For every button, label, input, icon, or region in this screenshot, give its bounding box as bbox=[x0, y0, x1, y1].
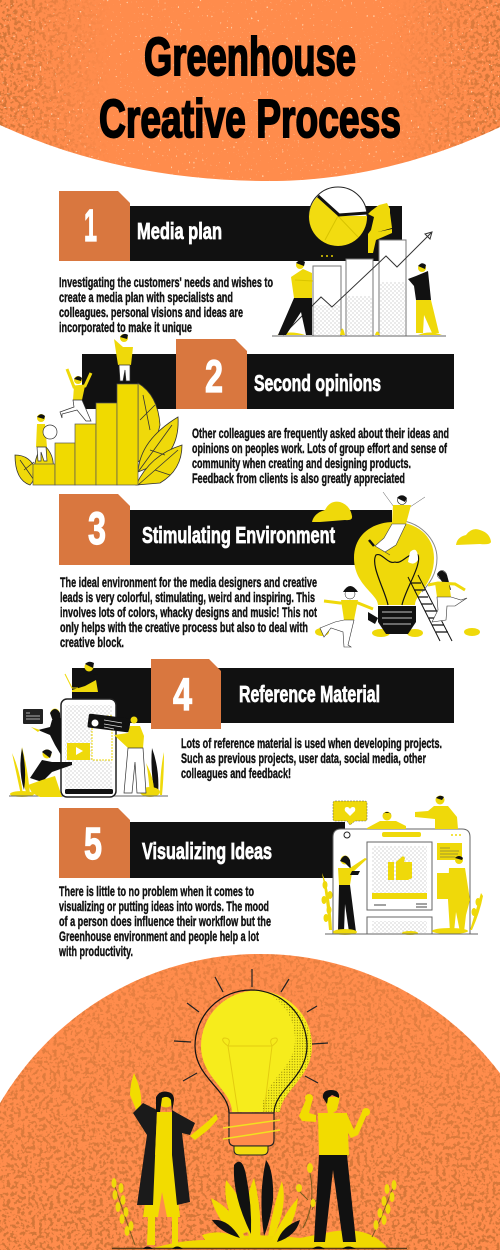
step 3 text: leads is very colorful, stimulating, weird and inspiring. This bbox=[60, 589, 315, 605]
step 5 header bar bbox=[130, 822, 345, 878]
person on pie bbox=[368, 203, 392, 253]
title bbox=[99, 27, 401, 149]
illustration: stairs and leaves bbox=[15, 334, 182, 485]
shorts bbox=[143, 1155, 180, 1217]
left sprig bbox=[112, 1178, 135, 1245]
step 2 number: 2 bbox=[205, 351, 223, 402]
ground line bbox=[112, 1248, 407, 1250]
side note bbox=[437, 843, 462, 899]
man right bbox=[114, 716, 146, 793]
woman behind phone bbox=[31, 708, 61, 755]
legs bbox=[314, 1155, 356, 1242]
rays bbox=[174, 969, 328, 1083]
chart bars bbox=[313, 240, 406, 336]
step 3 text: The ideal environment for the media designers and creative bbox=[60, 574, 317, 590]
person on bulb bbox=[369, 492, 425, 555]
yellow leaves bbox=[202, 1178, 298, 1240]
step 1 heading: Media plan bbox=[137, 218, 222, 244]
illustration: growth chart team bbox=[272, 187, 446, 336]
light bulb bbox=[354, 520, 437, 634]
person with sack bbox=[36, 414, 57, 461]
top orange header bbox=[0, 0, 500, 190]
step 3 text: only helps with the creative process but also to deal with bbox=[60, 619, 308, 635]
illustration: phone and users bbox=[9, 662, 168, 797]
ladder bbox=[408, 575, 452, 641]
step 1 text: create a media plan with specialists and bbox=[59, 289, 233, 305]
panel: step 5 visualizing ideas bbox=[58, 796, 483, 959]
man on top with laptop bbox=[65, 662, 98, 692]
black leaves bbox=[212, 1160, 300, 1242]
arms bbox=[299, 1097, 368, 1138]
step 4 text: colleagues and feedback! bbox=[181, 765, 291, 781]
arrow bbox=[283, 232, 432, 335]
step 5 text bbox=[58, 883, 271, 959]
title: Greenhouse bbox=[144, 27, 356, 87]
head bbox=[323, 1090, 340, 1113]
right sprig bbox=[372, 1180, 396, 1237]
step 1 header bar bbox=[130, 206, 402, 261]
woman left bbox=[338, 856, 367, 932]
step 5 text: of a person does influence their workflow but the bbox=[59, 913, 271, 929]
plants bbox=[322, 873, 483, 935]
step 5 text: Greenhouse environment and people help a lot bbox=[59, 928, 259, 944]
plants bbox=[10, 747, 164, 797]
raised arm bbox=[130, 1073, 143, 1112]
step 5 text: There is little to no problem when it comes to bbox=[59, 883, 254, 899]
step 4 number tab bbox=[151, 659, 221, 729]
illustration: woman bbox=[130, 1073, 218, 1249]
chat bubble large bbox=[87, 713, 131, 733]
panel: step 1 media plan bbox=[59, 187, 446, 336]
step 1 text bbox=[59, 274, 273, 335]
screen bbox=[333, 829, 470, 934]
ground bbox=[9, 795, 168, 797]
illustration: big light bulb bbox=[174, 969, 328, 1155]
step 2 header bar bbox=[82, 354, 454, 409]
kneeling man bbox=[28, 750, 72, 797]
step 2 text bbox=[192, 425, 449, 486]
step 5 number: 5 bbox=[84, 818, 102, 869]
stairs bbox=[33, 384, 138, 485]
panel: step 3 stimulating environment bbox=[59, 492, 491, 650]
step 4 heading: Reference Material bbox=[239, 681, 380, 707]
step 4 number: 4 bbox=[173, 669, 192, 720]
step 1 text: incorporated to make it unique bbox=[59, 319, 192, 335]
step 3 header bar bbox=[130, 510, 392, 565]
pie chart bbox=[309, 187, 367, 246]
head bbox=[156, 1092, 174, 1112]
man right bbox=[448, 856, 470, 932]
clouds bbox=[312, 502, 491, 637]
step 1 number: 1 bbox=[84, 200, 97, 251]
panel: step 4 reference material bbox=[9, 659, 454, 797]
step 3 number: 3 bbox=[88, 503, 106, 554]
illustration: man bbox=[299, 1090, 370, 1249]
torso bbox=[318, 1113, 349, 1156]
step 1 text: colleagues. personal visions and ideas are bbox=[59, 304, 243, 320]
shoes bbox=[312, 1246, 356, 1249]
person jumping bbox=[60, 369, 91, 421]
step 3 heading: Stimulating Environment bbox=[142, 522, 335, 548]
step 5 text: visualizing or putting ideas into words. The mood bbox=[59, 898, 269, 914]
phone bbox=[61, 699, 116, 797]
step 4 text bbox=[181, 735, 442, 781]
top bbox=[155, 1112, 172, 1155]
illustration: social media screen bbox=[322, 796, 483, 935]
thumbs up bbox=[388, 856, 412, 880]
person top bbox=[114, 334, 133, 381]
man left bbox=[278, 260, 313, 335]
step 1 text: Investigating the customers' needs and wishes to bbox=[59, 274, 273, 290]
man right bbox=[408, 263, 439, 333]
leaves bbox=[15, 383, 182, 485]
woman right bbox=[428, 570, 467, 622]
panel: step 2 second opinions bbox=[15, 334, 454, 486]
woman left bbox=[320, 586, 378, 647]
coat bbox=[133, 1103, 195, 1205]
step 2 number tab bbox=[176, 339, 247, 409]
step 5 heading: Visualizing Ideas bbox=[142, 838, 272, 864]
mounds bbox=[150, 1230, 388, 1249]
illustration: center plant and ground bbox=[112, 1160, 407, 1249]
chat bubble small bbox=[23, 709, 43, 724]
step 2 heading: Second opinions bbox=[254, 370, 381, 396]
ground bbox=[325, 933, 478, 935]
shoes bbox=[143, 1246, 183, 1249]
step 5 text: with productivity. bbox=[58, 943, 133, 959]
video card bbox=[67, 743, 90, 760]
bottom orange dome bbox=[0, 950, 500, 1250]
right arm bbox=[190, 1114, 218, 1140]
step 3 text: involves lots of colors, whacky designs and music! This not bbox=[60, 604, 317, 620]
man pointing bbox=[415, 796, 458, 829]
step 3 number tab bbox=[59, 494, 130, 565]
bulb base bbox=[223, 1113, 280, 1155]
lower legs bbox=[147, 1215, 178, 1245]
step 4 header bar bbox=[72, 668, 454, 723]
step 3 text: creative block. bbox=[60, 634, 124, 650]
thin plant bbox=[298, 1165, 316, 1228]
ground bbox=[272, 335, 446, 337]
step 5 number tab bbox=[59, 808, 130, 878]
step 1 number tab bbox=[59, 191, 130, 261]
like speech bubble bbox=[333, 801, 367, 825]
step 3 text bbox=[60, 574, 317, 650]
illustration: bulb and people bbox=[312, 492, 491, 647]
bulb glass bbox=[195, 990, 312, 1113]
woman peeking bbox=[367, 812, 406, 829]
